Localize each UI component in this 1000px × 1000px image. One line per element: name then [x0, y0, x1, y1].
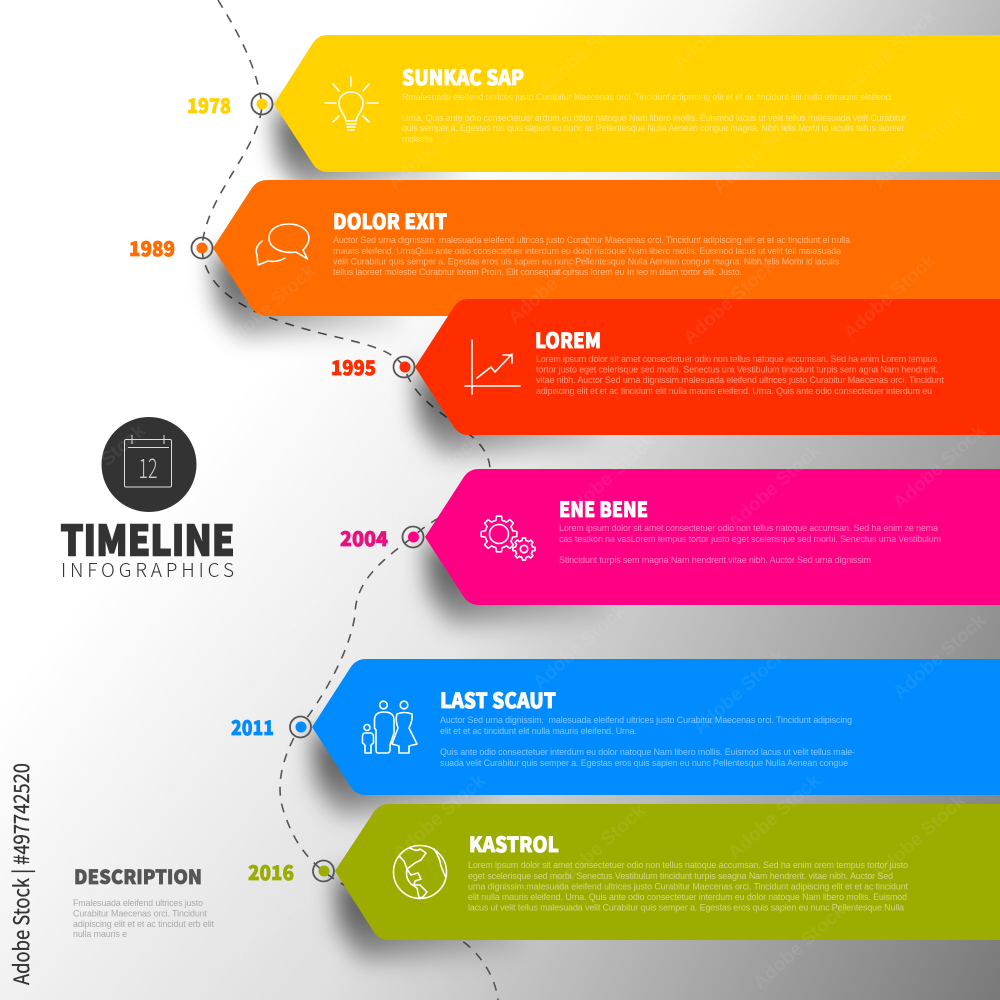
description text — [73, 898, 215, 939]
text block — [333, 235, 850, 277]
text block: cas testkon na vasLorem tempus tortor justo eget scelerisque sed morbi. Senectus urna Vestibulum — [559, 534, 941, 544]
heading: KASTROL — [469, 828, 559, 858]
description text: nulla mauris e — [73, 929, 127, 939]
description text: Curabitur Maecenas orci. Tincidunt — [73, 908, 208, 918]
text block: Rmalesuada eleifend ultrices justo Curabitur Maecenas orci. Tincidunt adipiscing elit et et ac tincidunt elit nulla etmauris eleifend. — [402, 92, 893, 102]
watermark: Adobe Stock — [869, 100, 970, 194]
year: 1978: 1978 — [187, 90, 231, 119]
text block: Auctor Sed urna dignissim. malesuada eleifend ultrices justo Curabitur Maecenas orci. Tincidunt adipiscing elit et et ac tincidunt el nulla — [333, 235, 850, 245]
text block: lacus ut velit tellus malesuada velit Curabitur quis semper a. Egestas eros quis sapien eu nunc Pellentesque Nulla — [468, 902, 904, 912]
marker: 2004 — [402, 526, 424, 548]
text block — [402, 92, 906, 144]
text block: tellus laoreet molestie Curabitur lorem Proin. Elit consequat cursus lorem eu In leo in diam tortor elit. Justo. — [333, 267, 742, 277]
panel: 2004 shadow — [427, 537, 611, 625]
watermark: Adobe Stock — [49, 420, 150, 514]
watermark: Adobe Stock — [384, 100, 485, 194]
watermark: Adobe Stock — [709, 105, 810, 199]
text block — [536, 354, 945, 396]
watermark: Adobe Stock — [724, 440, 825, 534]
icon: line chart — [465, 340, 520, 394]
text block: molestie — [402, 134, 433, 144]
text block: Urna. Quis ante odio consectetuer.erdum eu dolor natoque Nam libero mollis. Euismod lacus ut velit tellus malesuada velit Curabitur — [402, 113, 906, 123]
text block: tortor justo eget celerisque sed morbi. Senectus ura Vestibulum tincidunt turpis sem agna Nam hendrerit. — [536, 364, 938, 374]
panel: 1989 shadow — [215, 248, 399, 336]
watermark: Adobe Stock — [559, 430, 660, 524]
text block: Lorem ipsum dolor sit amet consectetuer odio non tellus natoque accumsan. Sed ha enim Lorem tempus — [536, 354, 938, 364]
year: 1995: 1995 — [331, 352, 376, 381]
panel: 1995 shadow — [417, 367, 601, 455]
subtitle: INFOGRAPHICS — [61, 556, 234, 583]
watermark: Adobe Stock — [889, 610, 990, 704]
panel: 1978 Sunkac Sap — [274, 35, 1000, 172]
marker: 2016 — [313, 860, 334, 882]
description text: Fmalesuada eleifend ultrices justo — [73, 898, 203, 908]
watermark: Adobe Stock — [389, 770, 490, 864]
heading: ENE BENE — [559, 493, 648, 523]
icon: family — [362, 701, 417, 753]
text block: quis semper a. Egestas ros quis sapien eu nunc ac Pellentesque Nulla Aenean congue magna. Nibh felis Morbi id iaculis tellus laoreet — [402, 123, 905, 133]
watermark: Adobe Stock — [64, 750, 165, 844]
watermark: Adobe Stock — [839, 5, 940, 99]
watermark: Adobe Stock — [724, 770, 825, 864]
text block: elit nulla mauris eleifend. Urna. Quis ante odio consectetuer interdum eu dolor natoque Nam libero mollis. Euismod — [468, 892, 907, 902]
year: 2004: 2004 — [340, 523, 388, 552]
year: 2011: 2011 — [231, 712, 274, 741]
text block: mauris eleifend. UrnaQuis ante odio consectetuer interdum eu dolor natoque Nam libero mollis. Euismod lacus ut velit tell malesuada — [333, 246, 841, 256]
watermark: Adobe Stock — [384, 430, 485, 524]
icon: speech bubbles — [256, 224, 309, 265]
watermark: Adobe Stock — [219, 260, 320, 354]
text block — [468, 860, 909, 912]
year: 2016: 2016 — [248, 857, 294, 886]
watermark: Adobe Stock — [689, 645, 790, 739]
icon: gears — [481, 516, 535, 560]
watermark: Adobe Stock — [534, 5, 635, 99]
heading: SUNKAC SAP — [402, 61, 524, 91]
text block: Lorem ipsum dolor sit amet consectetuer odio non tellus natoque accumsan. Sed ha enim orem tempus tortor justo — [468, 860, 908, 870]
text block: vitae nibh. Auctor Sed urna dignissim.malesuada eleifend ultrices justo Curabitur Maecenas orci. Tincidunt — [536, 375, 945, 385]
title: TIMELINE — [60, 508, 234, 568]
icon: calendar badge — [102, 417, 196, 512]
panel: 1978 shadow — [276, 104, 460, 192]
watermark: Adobe Stock — [19, 625, 120, 719]
stock id label: Adobe Stock | #497742520 — [6, 763, 36, 985]
watermark: Adobe Stock — [9, 295, 110, 389]
heading: LAST SCAUT — [440, 684, 556, 714]
watermark: Adobe Stock — [549, 800, 650, 894]
watermark: Adobe Stock — [214, 10, 315, 104]
dashed timeline path — [202, 0, 498, 1000]
description heading: DESCRIPTION — [74, 861, 202, 890]
panel: 1989 Dolor Exit — [213, 180, 1000, 316]
text block: adipiscing elit et et ac tincidunt elit nulla mauris eleifend. Urna. Quis ante odio consectetuer interdum eu — [536, 386, 932, 396]
text block: Lorem ipsum dolor sit amet consectetuer odio non tellus natoque accumsan. Sed ha enim ze nema — [559, 523, 938, 533]
text block: elit et et ac tincidunt elit nulla mauris eleifend. Urna. — [440, 726, 637, 736]
panel: 2011 shadow — [314, 727, 498, 815]
watermark: Adobe Stock — [224, 590, 325, 684]
text block: urna dignissim.malesuada eleifend ultrices justo Curabitur Maecenas orci. Tincidunt adipiscing elit et et ac tincidunt — [468, 882, 909, 892]
text block: Stincidunt turpis sem magna Nam hendrerit.vitae nibh. Auctor Sed urna dignissim — [559, 555, 871, 565]
marker: 2011 — [290, 716, 311, 738]
watermark: Adobe Stock — [679, 255, 780, 349]
watermark: Adobe Stock — [869, 790, 970, 884]
icon: globe — [394, 846, 446, 898]
watermark: Adobe Stock — [839, 250, 940, 344]
icon: light bulb — [325, 77, 378, 130]
panel: 2016 shadow — [337, 871, 521, 960]
marker: 1978 — [252, 94, 272, 114]
panel: 2004 Ene Bene — [425, 469, 1000, 605]
panel: 2016 Kastrol — [335, 804, 1000, 940]
text block — [559, 523, 941, 565]
watermark: Adobe Stock — [889, 420, 990, 514]
watermark: Adobe Stock — [749, 900, 850, 994]
watermark: Adobe Stock — [529, 600, 630, 694]
text block: Auctor Sed urna dignissim. malesuada eleifend ultrices justo Curabitur Maecenas orci. Tincidunt adipiscing — [440, 715, 852, 725]
heading: DOLOR EXIT — [333, 205, 447, 235]
marker: 1989 — [192, 238, 212, 258]
watermark: Adobe Stock — [504, 235, 605, 329]
description text: adipiscing elit et et ac tincidut erb elit — [73, 919, 215, 929]
icon: calendar badge: 12 — [138, 447, 158, 486]
marker: 1995 — [394, 356, 414, 378]
year: 1989: 1989 — [129, 233, 175, 262]
panel: 1995 Lorem — [415, 299, 1000, 435]
heading: LOREM — [535, 324, 601, 354]
text block: suada velit Curabitur quis semper a. Egestas eros quis sapien eu nunc Pellentesque Nulla Aenean congue — [440, 758, 848, 768]
panel: 2011 Last Scaut — [312, 659, 1000, 795]
text block: Quis ante odio consectetuer interdum eu dolor natoque Nam libero mollis. Euismod lacus ut velit tellus male- — [440, 747, 855, 757]
watermark: Adobe Stock — [44, 100, 145, 194]
text block: eget scelerisque sed morbi. Senectus Vestibulum tincidunt turpis seagna Nam hendrerit. vitae nibh. Auctor Sed — [468, 871, 893, 881]
watermark: Adobe Stock — [229, 870, 330, 964]
text block — [440, 715, 855, 768]
text block: velit Curabitur quis semper a. Egestas eros uis sapien eu nunc Pellentesque Nulla Aenean congue magna. Nibh felis Morbi id iaculis — [333, 256, 840, 266]
